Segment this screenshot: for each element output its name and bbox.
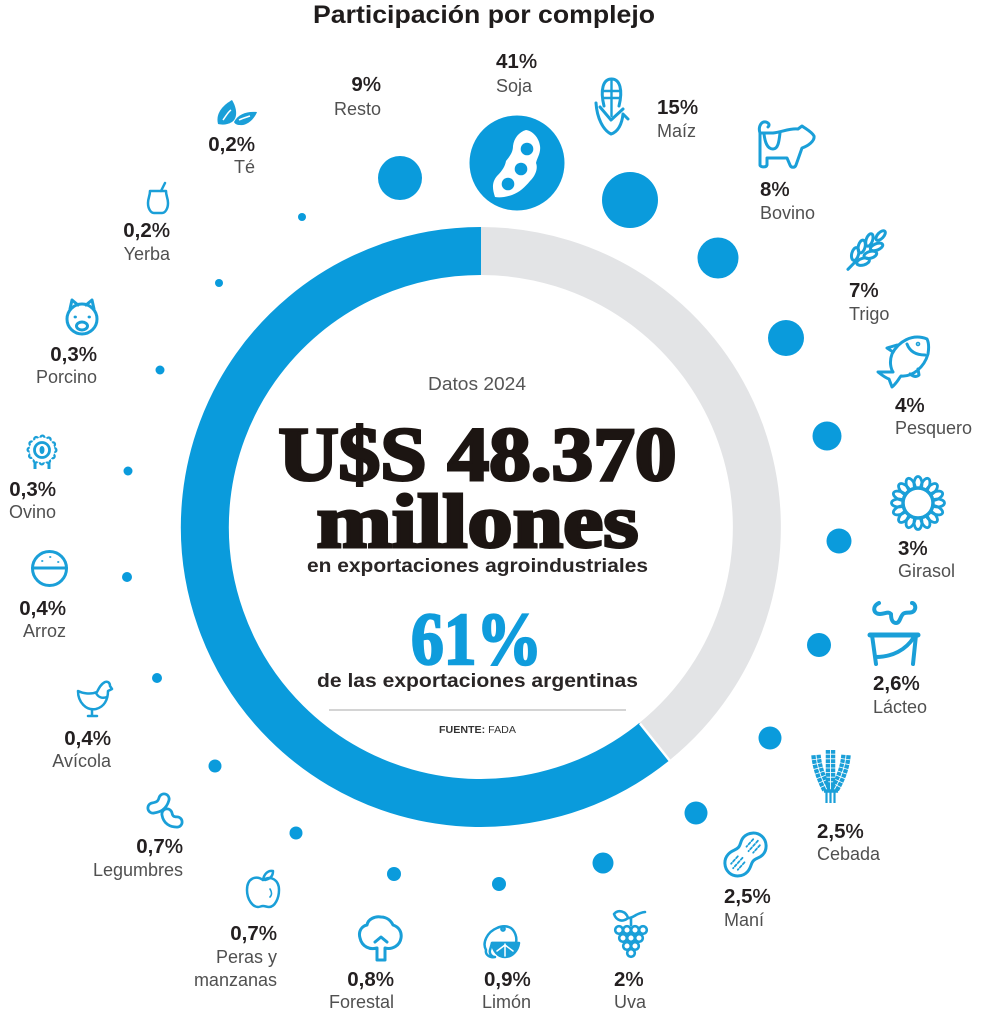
value and name [849, 279, 889, 324]
value and name: 3% [898, 537, 928, 560]
bubble [592, 852, 614, 874]
value and name [614, 968, 647, 1012]
value and name [724, 885, 771, 930]
item: Ovino [9, 438, 132, 522]
value and name: Porcino [36, 367, 97, 387]
value and name: 0,8% [347, 968, 394, 991]
value and name [329, 968, 394, 1012]
share caption: de las exportaciones argentinas [317, 670, 638, 692]
value and name [93, 835, 183, 880]
icon: mate gourd [148, 183, 168, 213]
item: Limón [482, 877, 531, 1012]
value and name: 0,2% [123, 219, 170, 242]
value and name: Avícola [52, 751, 112, 771]
bubble [492, 877, 506, 891]
blue segment: agro-industrial 61% [205, 251, 654, 803]
value and name [898, 537, 955, 581]
bubble [124, 466, 132, 476]
value and name: Lácteo [873, 697, 927, 717]
value and name [52, 727, 112, 771]
icon: barley [816, 750, 846, 803]
value and name: Trigo [849, 304, 889, 324]
value and name [482, 968, 531, 1012]
value and name: Resto [334, 99, 381, 119]
bubble [387, 867, 401, 881]
value and name [657, 96, 698, 141]
bubble [684, 802, 708, 824]
title: Participación por complejo [313, 1, 655, 29]
icon: cow [759, 122, 814, 167]
item: Avícola [52, 673, 162, 771]
value and name [19, 597, 66, 641]
value and name: Té [234, 157, 255, 177]
item: Bovino [698, 122, 815, 278]
value and name: 4% [895, 394, 925, 417]
item: Soja [470, 50, 564, 210]
bubble [215, 279, 223, 287]
item: Uva [592, 852, 647, 1012]
item: Arroz [19, 552, 132, 641]
bubble [807, 633, 831, 657]
icon: hen [78, 682, 112, 716]
year note: Datos 2024 [428, 374, 526, 394]
icon: lemon [485, 926, 519, 957]
icon: tree [359, 917, 401, 960]
item: Maní [684, 802, 772, 930]
bubble [208, 760, 222, 772]
icon: apple [247, 871, 279, 907]
value and name [334, 73, 381, 119]
value and name: 0,3% [50, 343, 97, 366]
item: Peras y manzanas [194, 826, 302, 990]
bubble [156, 366, 164, 374]
bubble [152, 673, 162, 683]
value and name: Cebada [817, 844, 881, 864]
value and name [194, 922, 277, 990]
value and name: 41% [496, 50, 537, 73]
main amount: U$S 48.370 [278, 413, 676, 497]
center text block [278, 374, 676, 736]
main amount unit: millones [316, 480, 638, 564]
item: Maíz [596, 79, 698, 228]
icon: peanut [719, 828, 772, 881]
value and name: 0,3% [9, 478, 56, 501]
icon: sunflower [892, 476, 944, 530]
value and name: 0,7% [136, 835, 183, 858]
value and name: Ovino [9, 502, 56, 522]
share figure: 61% [411, 599, 542, 681]
value and name: 9% [351, 73, 381, 96]
value and name [9, 478, 56, 522]
bubble [378, 156, 422, 200]
donut chart: 61% share [205, 251, 757, 803]
value and name: Limón [482, 992, 531, 1012]
item: Resto [334, 73, 422, 200]
bubble [290, 826, 302, 840]
source: FUENTE: FADA [439, 724, 516, 736]
gray segment: rest of exports [481, 251, 757, 742]
icon: grapes [614, 911, 647, 957]
value and name: 2,5% [817, 820, 864, 843]
bubble [298, 213, 306, 221]
value and name: Soja [496, 76, 533, 96]
bubble [812, 422, 842, 450]
value and name: Uva [614, 992, 647, 1012]
item: Forestal [329, 867, 401, 1012]
value and name: 2,6% [873, 672, 920, 695]
value and name: 7% [849, 279, 879, 302]
item: Té [208, 100, 306, 221]
value and name [36, 343, 97, 387]
amount caption: en exportaciones agroindustriales [307, 555, 648, 577]
icon: cow head and milk pail [870, 603, 918, 664]
value and name: 2% [614, 968, 644, 991]
item: Cebada [758, 726, 881, 864]
value and name [496, 50, 537, 96]
bubble [768, 320, 804, 356]
value and name: 0,7% [230, 922, 277, 945]
value and name: 0,4% [19, 597, 66, 620]
value and name [208, 133, 255, 177]
value and name: 0,9% [484, 968, 531, 991]
value and name: Forestal [329, 992, 394, 1012]
value and name: Maní [724, 910, 764, 930]
item: Pesquero [812, 337, 972, 450]
icon: pig [67, 300, 97, 334]
item: Lácteo [807, 603, 927, 717]
value and name: 15% [657, 96, 698, 119]
value and name: Arroz [23, 621, 66, 641]
bubble [698, 238, 738, 278]
value and name [817, 820, 881, 864]
bubble [122, 572, 132, 582]
value and name [895, 394, 972, 438]
item: Porcino [36, 300, 164, 387]
value and name: 8% [760, 178, 790, 201]
item: Yerba [123, 183, 223, 287]
value and name [873, 672, 927, 717]
value and name: Girasol [898, 561, 955, 581]
value and name: 0,2% [208, 133, 255, 156]
item: Trigo [768, 223, 894, 356]
icon: sheep [30, 438, 54, 469]
item: Girasol [826, 476, 955, 581]
value and name [760, 178, 815, 223]
value and name: 0,4% [64, 727, 111, 750]
icon: beans [153, 799, 177, 822]
value and name: manzanas [194, 970, 277, 990]
bubble [758, 726, 782, 750]
icon: corn [596, 79, 628, 134]
value and name: Pesquero [895, 418, 972, 438]
icon: fish [878, 337, 929, 387]
bubble [602, 172, 658, 228]
value and name: Legumbres [93, 860, 183, 880]
value and name [123, 219, 171, 264]
bubble with soy pod icon [470, 116, 564, 210]
value and name: Peras y [216, 947, 277, 967]
value and name: 2,5% [724, 885, 771, 908]
bubble [826, 528, 852, 554]
icon: tea leaves [217, 100, 257, 125]
icon: rice bowl [32, 552, 66, 586]
value and name: Bovino [760, 203, 815, 223]
icon: wheat [839, 223, 894, 278]
value and name: Yerba [124, 244, 171, 264]
value and name: Maíz [657, 121, 696, 141]
item: Legumbres [93, 760, 222, 880]
